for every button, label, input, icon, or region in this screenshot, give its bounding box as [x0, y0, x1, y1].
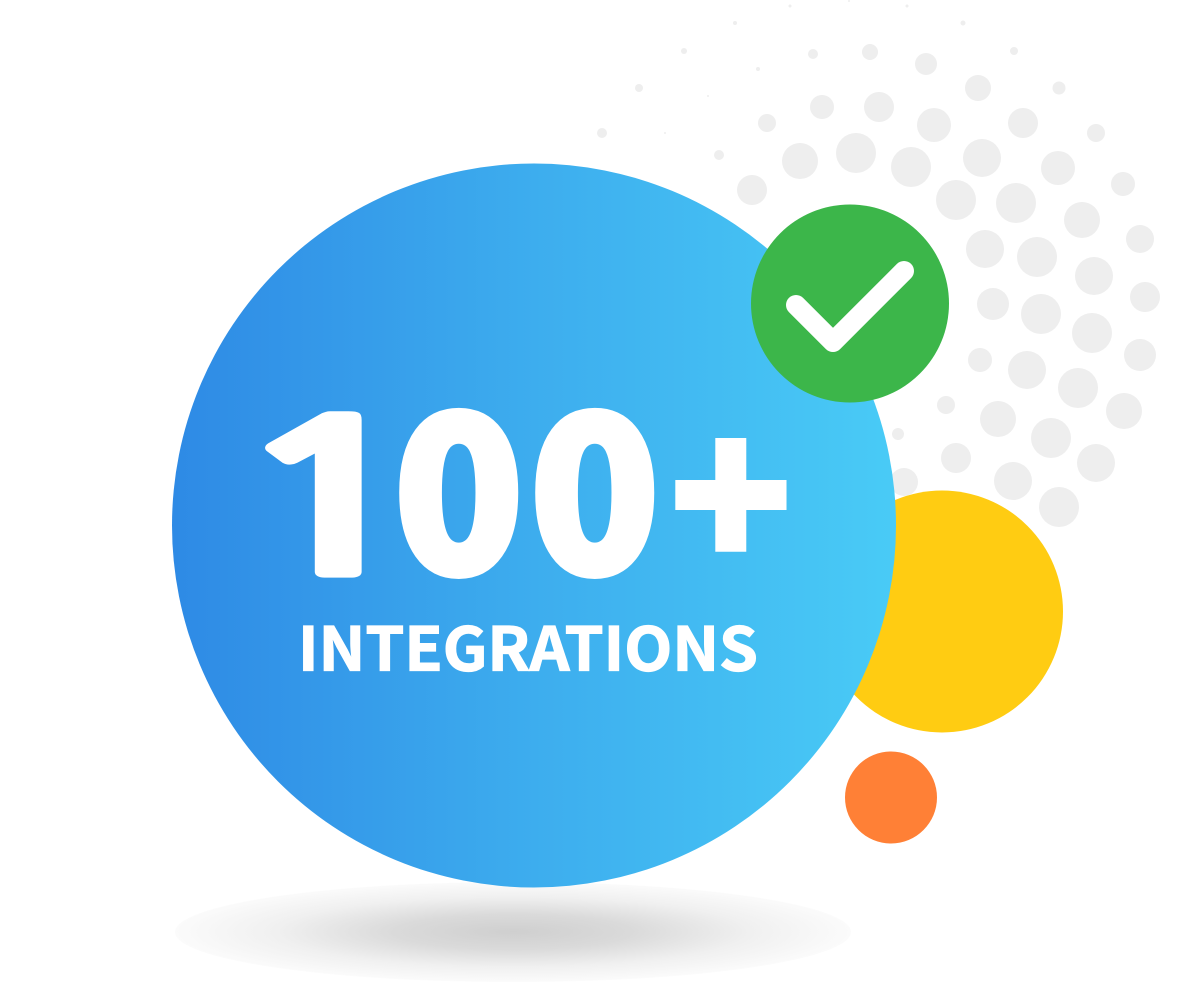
main blue circle: [172, 164, 896, 888]
headline number: [226, 326, 792, 634]
ground shadow: [175, 882, 851, 982]
label: integrations: INTEGRATIONS: [298, 602, 758, 688]
headline number: 1: [226, 397, 435, 606]
headline number: 0: [394, 326, 523, 634]
orange circle: [845, 752, 937, 844]
icon: check mark: [796, 271, 904, 342]
green check badge: [751, 204, 949, 402]
headline number: +: [670, 338, 792, 628]
headline number: 0: [530, 326, 659, 634]
yellow circle: [821, 490, 1063, 732]
dot pattern: [597, 0, 1160, 527]
